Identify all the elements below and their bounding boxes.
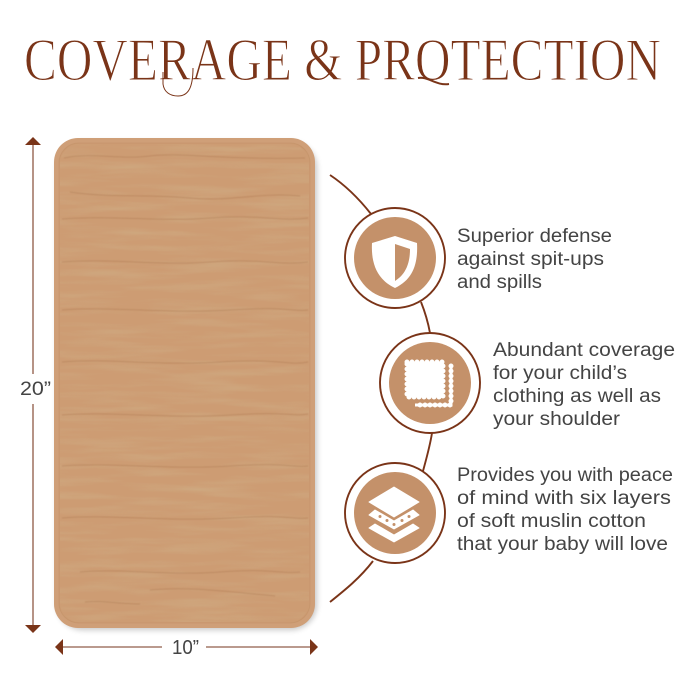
- width dimension arrow: [55, 637, 318, 659]
- text: superior defense: Superior defense: [457, 226, 612, 247]
- text: peace of mind: that your baby will love: [457, 534, 668, 555]
- text: abundant coverage: clothing as well as: [493, 386, 661, 407]
- text: peace of mind: of mind with six layers: [457, 488, 671, 509]
- text: abundant coverage: Abundant coverage: [493, 340, 675, 361]
- text: abundant coverage: your shoulder: [493, 409, 621, 430]
- burp cloth illustration: [54, 138, 317, 630]
- text: superior defense: and spills: [457, 272, 542, 293]
- icon: scalloped cloths: [380, 333, 480, 433]
- text: peace of mind: [457, 465, 673, 555]
- height dimension arrow: [20, 137, 51, 633]
- text: peace of mind: of soft muslin cotton: [457, 511, 646, 532]
- text: abundant coverage: [493, 340, 675, 430]
- connector curve: [330, 175, 432, 602]
- width dimension arrow: 10”: [172, 637, 199, 659]
- text: abundant coverage: for your child’s: [493, 363, 627, 384]
- text: peace of mind: Provides you with peace: [457, 465, 673, 486]
- text: superior defense: against spit-ups: [457, 249, 604, 270]
- height dimension arrow: 20”: [20, 379, 51, 400]
- text: superior defense: [457, 226, 612, 293]
- icon: shield: [345, 208, 445, 308]
- icon: six layers: [345, 463, 445, 563]
